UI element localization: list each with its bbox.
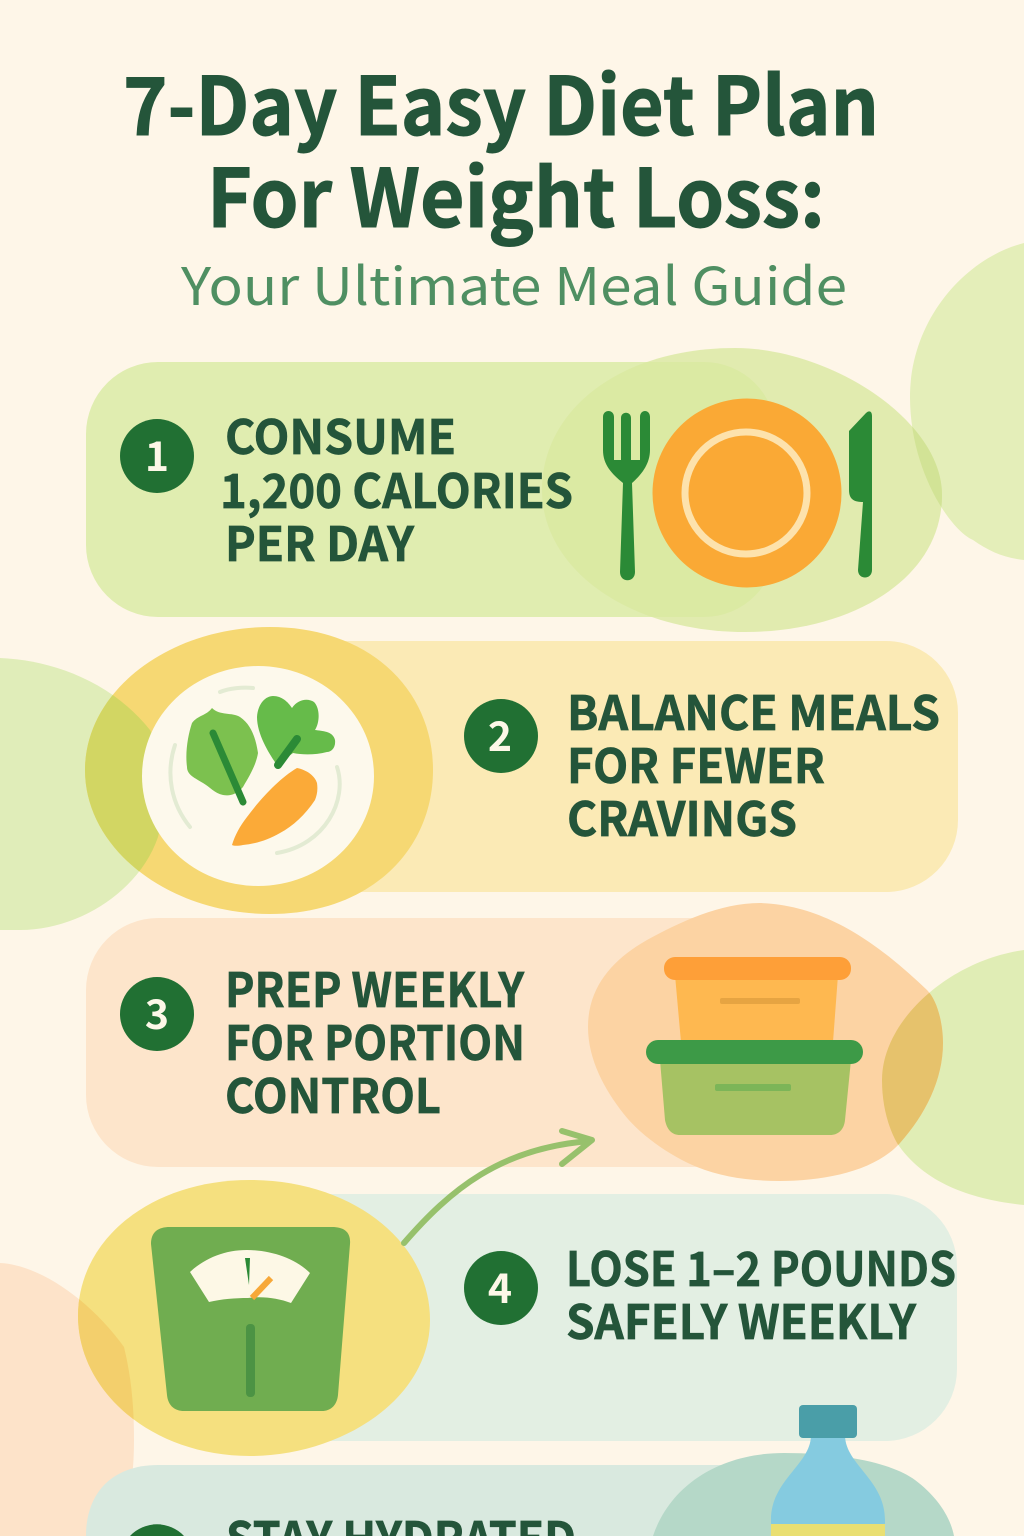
icon blob [653,1453,954,1536]
blob overlap [912,426,942,507]
step text: PER DAY [225,506,415,575]
step text: LOSE 1–2 POUNDS [566,1231,956,1300]
heading [123,43,879,320]
step text: SAFELY WEEKLY [566,1284,917,1353]
panel: step 1 [86,348,942,632]
icon: plate of vegetables [142,666,374,886]
arrow [404,1131,592,1243]
number badge 4 [464,1251,538,1325]
panel: step 2 [85,627,958,914]
title: For Weight Loss: [207,135,825,251]
top container [675,975,838,1042]
step text: FOR PORTION [225,1005,525,1074]
step text: PREP WEEKLY [225,952,525,1021]
icon blob [542,348,942,632]
step text: CRAVINGS [567,781,797,850]
number badge 4: 4 [488,1255,512,1315]
panel: step 3 [86,903,943,1181]
fork [603,411,650,580]
subtitle: Your Ultimate Meal Guide [180,245,847,320]
step text [225,952,525,1127]
scale stem [246,1324,255,1397]
lettuce leaf [186,708,258,795]
title [123,43,879,251]
blob overlap [882,992,943,1145]
plate rim marks [170,688,340,853]
dial mark [245,1258,250,1285]
icon blob [78,1180,430,1456]
step text: 1,200 CALORIES [220,453,573,522]
background blob: left green [0,658,163,930]
number badge 1: 1 [145,423,169,483]
blob overlap [78,1299,134,1420]
step text: CONTROL [225,1058,441,1127]
bottom container [660,1060,851,1135]
needle [252,1278,271,1298]
knife [849,411,872,578]
icon blob [588,903,943,1181]
carrot [232,768,317,846]
number badge 3 [120,977,194,1051]
background blob: right green [882,950,1024,1205]
step text: BALANCE MEALS [567,675,940,744]
icon: stacked containers [646,957,863,1135]
icon blob [85,627,433,914]
spinach leaf [257,696,335,765]
step text: CONSUME [225,399,456,468]
plate [142,666,374,886]
step text [567,675,940,850]
plate [652,398,842,588]
dial [190,1250,310,1303]
blob overlap [85,695,159,872]
spinach stem [278,739,297,765]
step text [220,399,573,575]
step text: FOR FEWER [567,728,825,797]
number badge 3: 3 [145,981,169,1041]
icon: scale [151,1227,350,1411]
scale body [151,1227,350,1411]
background blob: bottom left peach [0,1263,134,1536]
icon: plate and cutlery [603,398,872,588]
number badge 2: 2 [488,703,512,763]
panel: step 5 [86,1405,954,1536]
panel: step 4 [78,1180,957,1456]
icon: water bottle [771,1405,885,1536]
background blob: top right green [910,243,1024,560]
number badge 1 [120,419,194,493]
title: 7-Day Easy Diet Plan [123,43,879,159]
number badge 5 [130,1524,184,1536]
number badge 2 [464,699,538,773]
leaf stem [213,733,243,802]
plate ring [685,432,807,554]
step text [566,1231,956,1353]
